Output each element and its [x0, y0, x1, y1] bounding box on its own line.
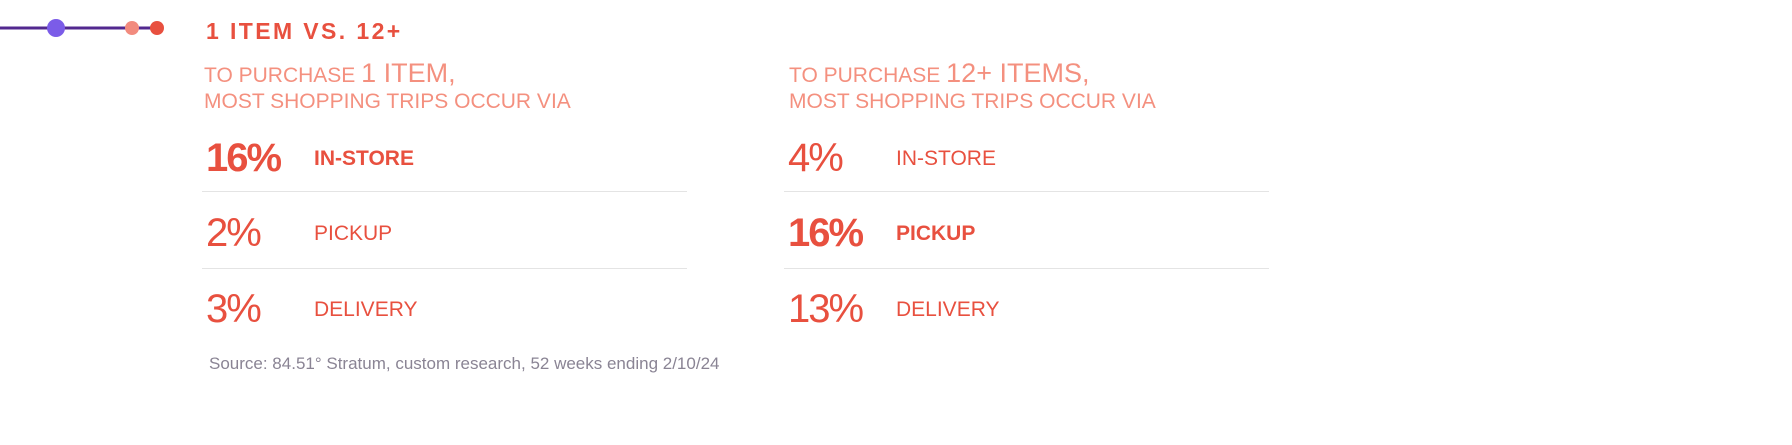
- row pickup: 2%: [206, 211, 260, 255]
- source note: Source: 84.51° Stratum, custom research, 52 weeks ending 2/10/24: [209, 354, 719, 373]
- row delivery: [788, 287, 1000, 331]
- row in-store: [788, 136, 996, 180]
- subtitle: MOST SHOPPING TRIPS OCCUR VIA: [789, 90, 1156, 113]
- row delivery: 13%: [788, 287, 862, 331]
- subtitle: [204, 58, 571, 113]
- row delivery: DELIVERY: [896, 298, 1000, 321]
- panel: 12+ items: [784, 58, 1269, 331]
- row in-store: IN-STORE: [314, 147, 414, 170]
- row in-store: [206, 136, 414, 180]
- row pickup: PICKUP: [896, 222, 975, 245]
- decorative timeline with dots: [0, 19, 164, 37]
- row pickup: [206, 211, 392, 255]
- title: 1 ITEM VS. 12+: [206, 18, 403, 44]
- subtitle: [789, 58, 1156, 113]
- row in-store: IN-STORE: [896, 147, 996, 170]
- row in-store: 4%: [788, 136, 842, 180]
- row pickup: [788, 211, 975, 255]
- row delivery: [206, 287, 418, 331]
- row delivery: DELIVERY: [314, 298, 418, 321]
- subtitle: MOST SHOPPING TRIPS OCCUR VIA: [204, 90, 571, 113]
- subtitle: TO PURCHASE 1 ITEM,: [204, 58, 456, 88]
- row pickup: PICKUP: [314, 222, 392, 245]
- panel: 1 item: [202, 58, 687, 331]
- subtitle: TO PURCHASE 12+ ITEMS,: [789, 58, 1089, 88]
- row pickup: 16%: [788, 211, 862, 255]
- row delivery: 3%: [206, 287, 260, 331]
- row in-store: 16%: [206, 136, 280, 180]
